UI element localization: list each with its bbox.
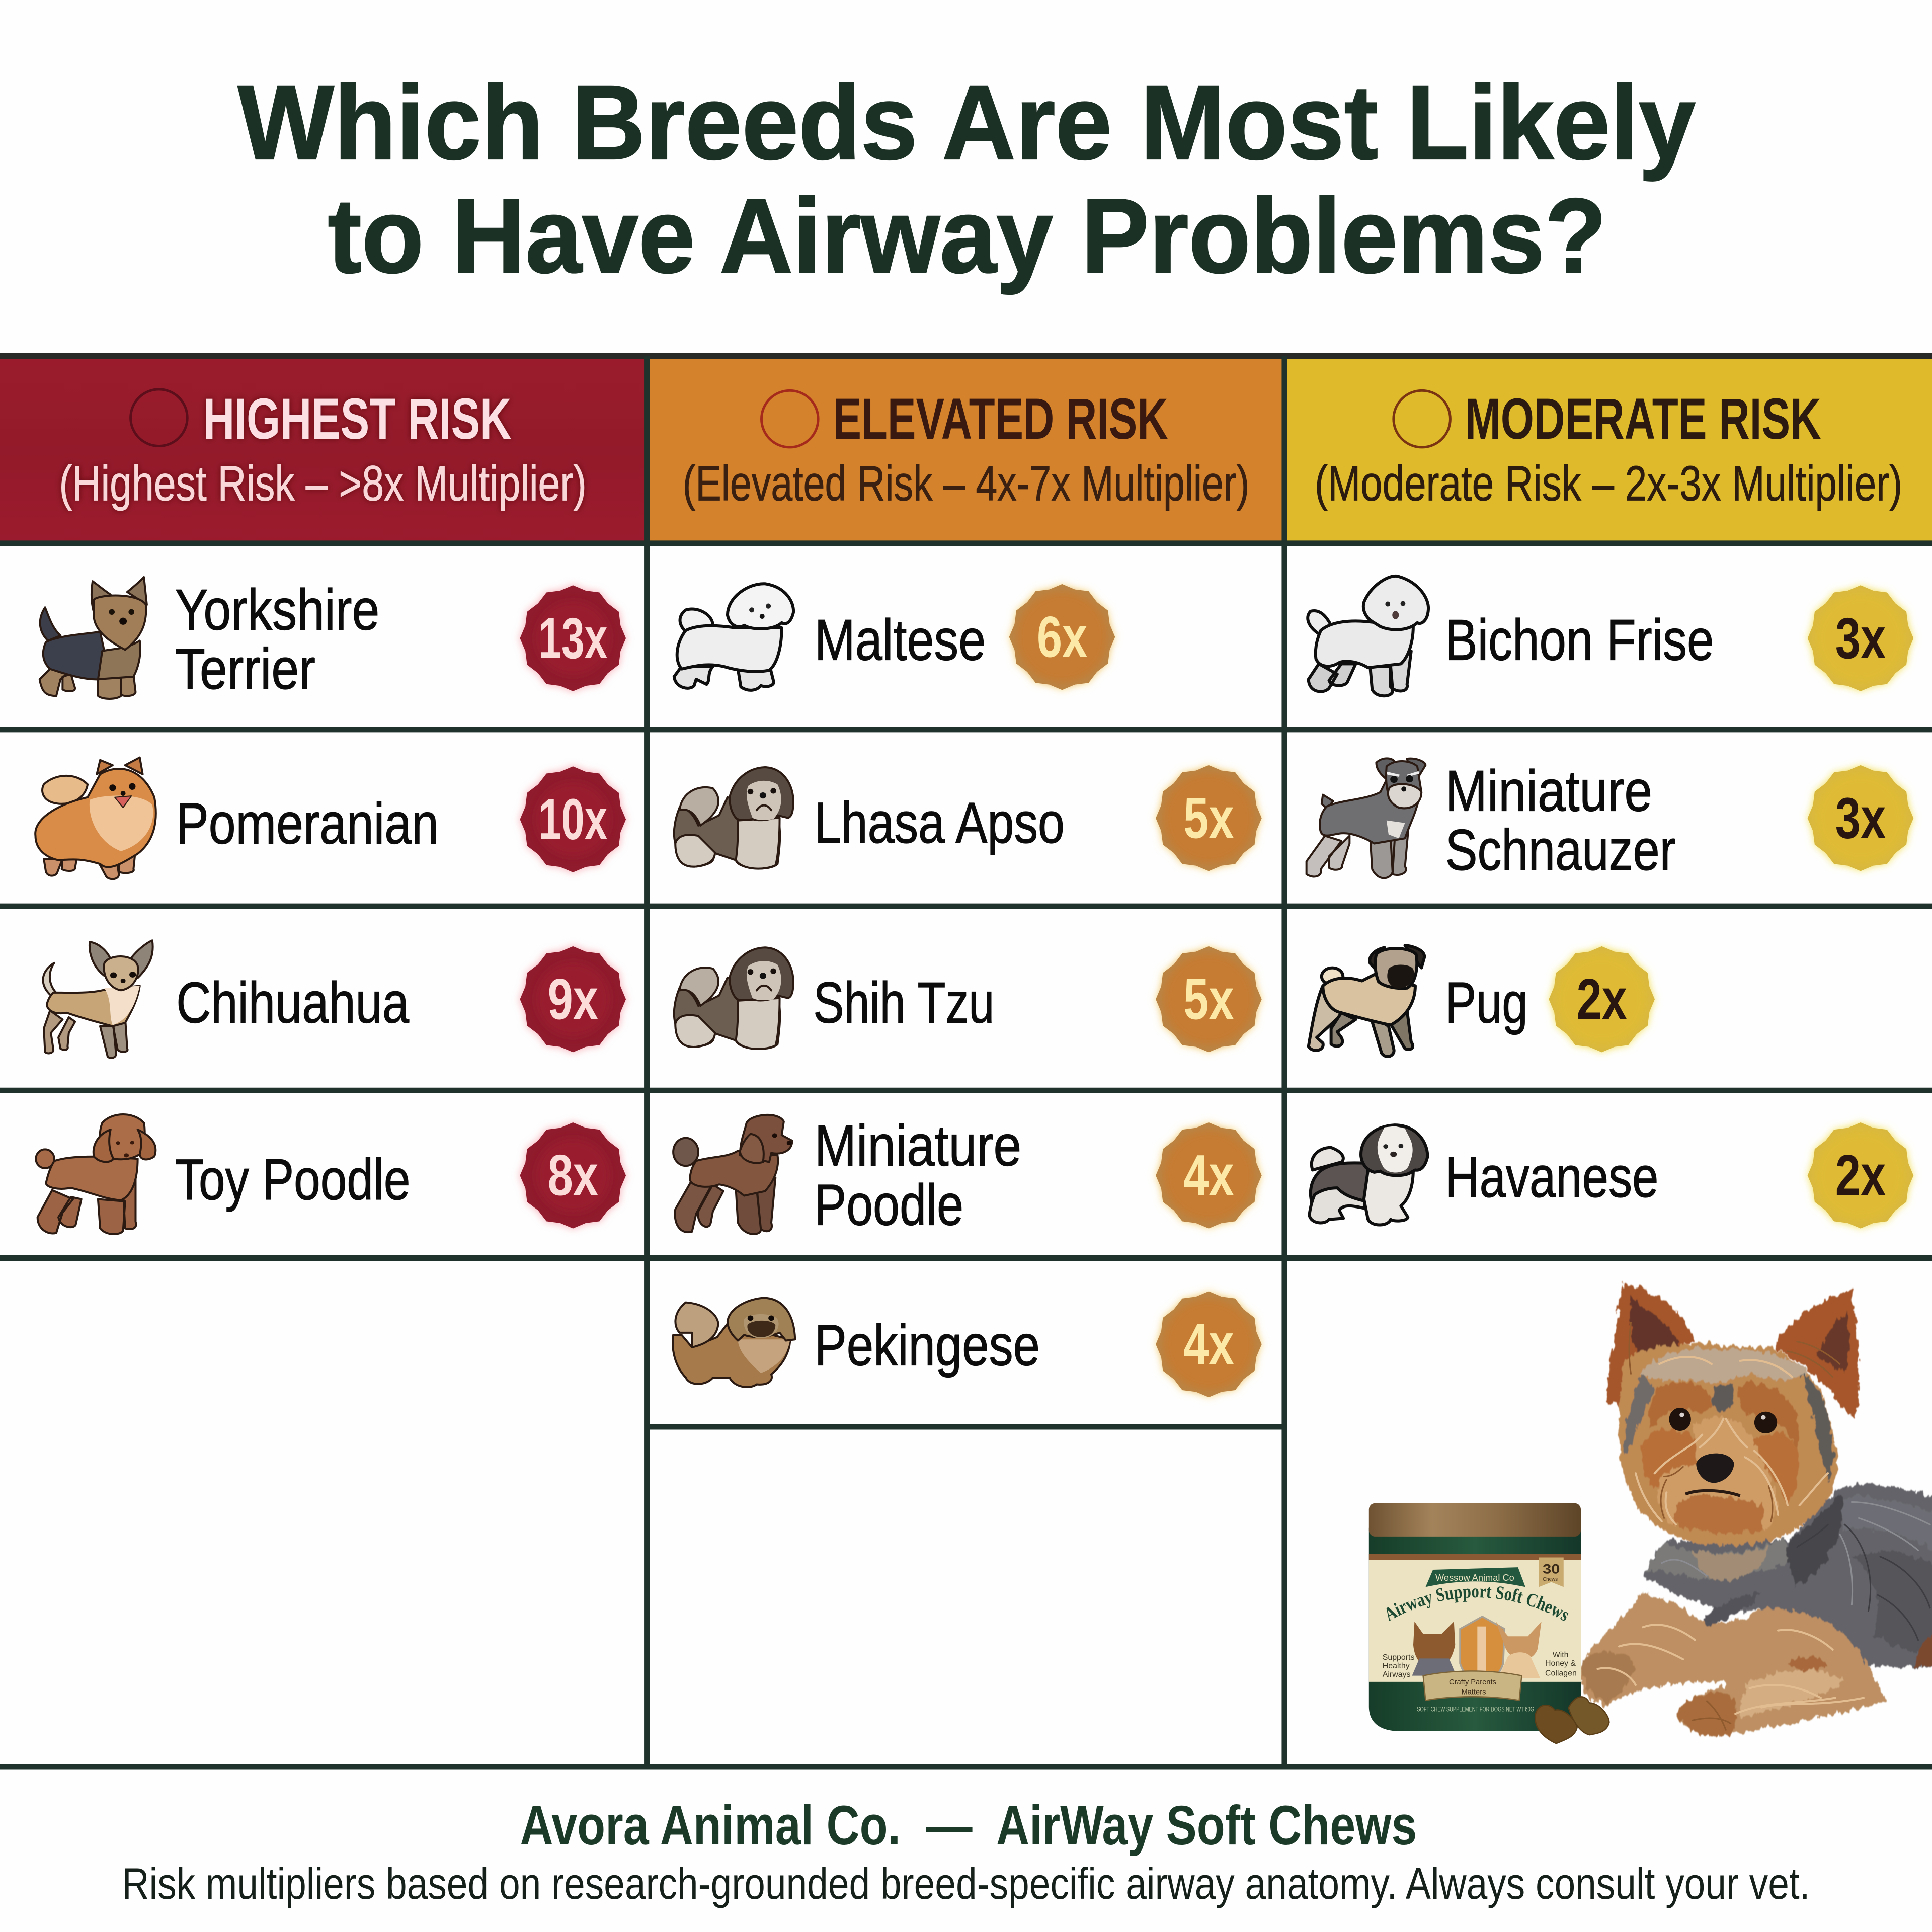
label: Yorkshire Terrier: Terrier xyxy=(175,637,315,701)
icon: elevated risk ring xyxy=(761,390,818,447)
row: Chihuahua xyxy=(43,940,626,1058)
title: to Have Airway Problems? xyxy=(328,176,1606,295)
panel: highest risk header xyxy=(0,357,647,543)
count tag: 30 xyxy=(1543,1561,1560,1576)
label: Miniature Poodle xyxy=(815,1114,1021,1237)
row: Yorkshire Terrier xyxy=(40,577,626,701)
jar footer text: SOFT CHEW SUPPLEMENT FOR DOGS NET WT 60G xyxy=(1417,1706,1534,1713)
badge: 3x: 3x xyxy=(1835,786,1886,850)
label: Bichon Frise: Bichon Frise xyxy=(1445,608,1714,672)
icon: Lhasa Apso xyxy=(674,767,793,869)
icon: Chihuahua xyxy=(43,940,153,1058)
label: Miniature Poodle: Miniature xyxy=(815,1114,1021,1178)
badge: 2x xyxy=(1549,946,1655,1052)
badge: 5x xyxy=(1156,765,1262,871)
icon: Bichon Frise xyxy=(1308,576,1428,696)
badge: 13x xyxy=(520,585,626,691)
subheading: highest risk: (Highest Risk – >8x Multiplier) xyxy=(59,455,587,511)
row: Pomeranian xyxy=(35,758,626,879)
icon: Miniature Schnauzer xyxy=(1307,758,1425,878)
row: Maltese xyxy=(674,584,1115,690)
label: Pomeranian: Pomeranian xyxy=(176,791,439,856)
left claim: Healthy xyxy=(1383,1662,1410,1670)
right claim xyxy=(1545,1651,1577,1678)
scroll banner: Crafty Parents xyxy=(1449,1678,1496,1686)
label: Toy Poodle: Toy Poodle xyxy=(175,1148,411,1212)
row: Pekingese xyxy=(673,1292,1262,1397)
label: Miniature Schnauzer xyxy=(1445,759,1676,882)
panel: moderate risk header xyxy=(1286,357,1932,543)
badge: 5x: 5x xyxy=(1183,786,1234,850)
row: Miniature Schnauzer xyxy=(1307,758,1913,882)
icon: Miniature Poodle xyxy=(673,1115,792,1234)
icon: Maltese xyxy=(674,584,793,690)
jar body xyxy=(1369,1528,1581,1731)
icon: highest risk ring xyxy=(131,389,187,446)
badge: 3x: 3x xyxy=(1835,606,1886,671)
heading: highest risk: HIGHEST RISK xyxy=(203,387,511,451)
label: Miniature Poodle: Poodle xyxy=(815,1173,963,1237)
row: Bichon Frise xyxy=(1308,576,1913,696)
badge: 9x xyxy=(520,946,626,1052)
right claim: Honey & xyxy=(1545,1659,1576,1668)
badge: 2x xyxy=(1808,1122,1913,1229)
row: Toy Poodle xyxy=(36,1114,626,1234)
badge: 6x xyxy=(1009,584,1115,690)
jar lid xyxy=(1369,1503,1581,1537)
badge: 13x: 13x xyxy=(538,606,607,671)
row: Shih Tzu xyxy=(674,946,1262,1052)
icon: Pug xyxy=(1309,945,1424,1057)
icon: Pekingese xyxy=(673,1298,795,1387)
label: Havanese: Havanese xyxy=(1445,1145,1658,1210)
row: Pug xyxy=(1309,945,1655,1057)
label: Miniature Schnauzer: Schnauzer xyxy=(1445,818,1676,882)
label: Pekingese: Pekingese xyxy=(815,1313,1040,1378)
heading: elevated risk: ELEVATED RISK xyxy=(833,387,1168,451)
label: Chihuahua: Chihuahua xyxy=(176,971,410,1035)
label: Pug: Pug xyxy=(1445,971,1528,1035)
scroll banner xyxy=(1423,1671,1521,1701)
icon: Pomeranian xyxy=(35,758,156,879)
badge: 4x xyxy=(1156,1292,1262,1397)
label: Yorkshire Terrier xyxy=(175,578,379,701)
icon: Havanese xyxy=(1309,1125,1427,1225)
photo: Yorkshire terrier lying down xyxy=(1581,1282,1932,1736)
scroll banner: Matters xyxy=(1461,1688,1486,1696)
product name xyxy=(1389,1597,1565,1622)
label: Lhasa Apso: Lhasa Apso xyxy=(815,791,1065,855)
badge: 3x xyxy=(1808,765,1913,871)
right claim: With xyxy=(1553,1651,1569,1659)
right claim: Collagen xyxy=(1545,1669,1577,1678)
badge: 8x: 8x xyxy=(548,1144,598,1208)
label: Shih Tzu: Shih Tzu xyxy=(813,971,994,1035)
badge: 10x: 10x xyxy=(538,787,607,852)
count tag xyxy=(1539,1558,1564,1587)
icon: Yorkshire Terrier xyxy=(40,577,147,699)
product: supplement jar xyxy=(1369,1503,1581,1731)
brand ribbon xyxy=(1425,1567,1525,1587)
badge: 5x: 5x xyxy=(1183,967,1234,1031)
label: Maltese: Maltese xyxy=(815,608,986,672)
icon: moderate risk ring xyxy=(1394,390,1450,447)
label art: shield and dogs xyxy=(1412,1617,1542,1685)
badge: 2x: 2x xyxy=(1576,967,1627,1031)
soft chews xyxy=(1535,1697,1609,1743)
icon: Toy Poodle xyxy=(36,1114,155,1234)
row: Lhasa Apso xyxy=(674,765,1262,871)
jar label xyxy=(1369,1554,1581,1701)
badge: 3x xyxy=(1808,585,1913,691)
badge: 4x: 4x xyxy=(1183,1312,1234,1377)
panel: elevated risk header xyxy=(650,357,1285,543)
icon: Shih Tzu xyxy=(674,947,793,1049)
row: Miniature Poodle xyxy=(673,1114,1262,1237)
badge: 10x xyxy=(520,766,626,872)
badge: 5x xyxy=(1156,946,1262,1052)
label: Miniature Schnauzer: Miniature xyxy=(1445,759,1652,823)
jar label: Airway Support Soft Chews xyxy=(1387,1586,1569,1621)
badge: 2x: 2x xyxy=(1835,1144,1886,1208)
badge: 4x: 4x xyxy=(1183,1144,1234,1208)
title: Which Breeds Are Most Likely xyxy=(238,63,1696,182)
count tag: Chews xyxy=(1543,1577,1558,1582)
badge: 8x xyxy=(520,1122,626,1229)
row: Havanese xyxy=(1309,1122,1913,1229)
left claim xyxy=(1383,1653,1414,1679)
subheading: elevated risk: (Elevated Risk – 4x-7x Multiplier) xyxy=(683,455,1249,511)
title xyxy=(238,63,1696,295)
brand ribbon: Wessow Animal Co xyxy=(1435,1572,1514,1583)
badge: 9x: 9x xyxy=(548,967,598,1031)
left claim: Supports xyxy=(1383,1653,1414,1662)
left claim: Airways xyxy=(1383,1670,1410,1679)
badge: 6x: 6x xyxy=(1037,605,1087,669)
badge: 4x xyxy=(1156,1122,1262,1229)
label: Yorkshire Terrier: Yorkshire xyxy=(175,578,379,642)
footer brand line: Avora Animal Co. — AirWay Soft Chews xyxy=(520,1795,1417,1857)
